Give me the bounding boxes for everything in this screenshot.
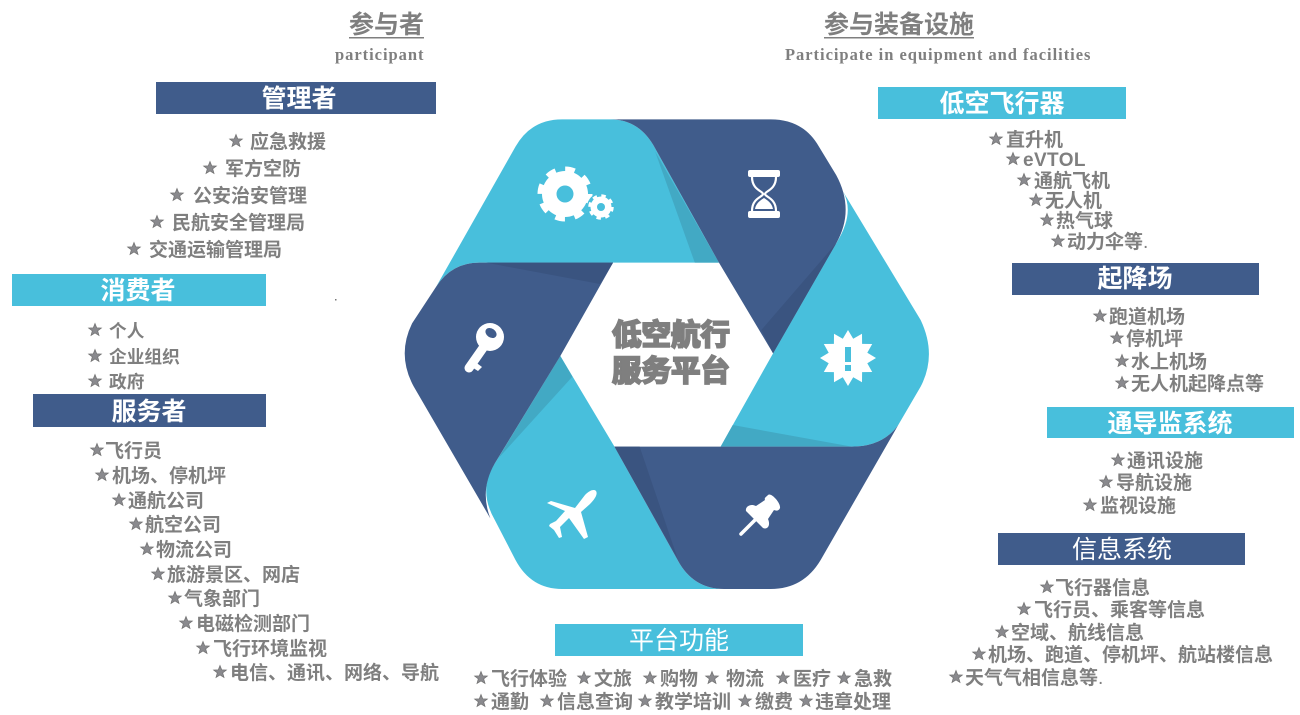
list: platform functions: 医疗 xyxy=(793,668,831,690)
bar: platform functions xyxy=(555,624,803,656)
icon: alert burst xyxy=(820,330,876,386)
list: service providers: 电磁检测部门 xyxy=(196,612,310,635)
icon: airplane xyxy=(547,490,597,539)
center label xyxy=(612,319,730,388)
decorative dot xyxy=(335,299,336,300)
bar: managers: 管理者 xyxy=(261,85,337,113)
list: aircraft: 通航飞机 xyxy=(1034,169,1110,192)
list: information systems: 空域、航线信息 xyxy=(1011,621,1144,644)
list: airfields: 停机坪 xyxy=(1126,328,1183,350)
list: information systems: 机场、跑道、停机坪、航站楼信息 xyxy=(988,643,1273,666)
list: service providers: 气象部门 xyxy=(184,587,260,610)
list: CNS systems xyxy=(1084,450,1203,517)
list: service providers: 航空公司 xyxy=(145,513,221,536)
list: service providers: 机场、停机坪 xyxy=(112,465,226,487)
list: information systems: 飞行员、乘客等信息 xyxy=(1034,598,1205,621)
list: service providers: 飞行环境监视 xyxy=(213,637,327,660)
hexagon ribbon diagram xyxy=(405,119,929,589)
list: airfields: 无人机起降点等 xyxy=(1131,373,1264,395)
list: aircraft xyxy=(990,129,1148,253)
list: CNS systems: 监视设施 xyxy=(1100,495,1176,517)
bar: managers xyxy=(156,82,436,114)
list: consumers: 企业组织 xyxy=(109,346,180,367)
list: platform functions: 缴费 xyxy=(755,691,793,713)
list: CNS systems: 导航设施 xyxy=(1116,471,1192,494)
bar: airfields xyxy=(1012,263,1259,295)
list: managers: 公安治安管理 xyxy=(193,184,307,207)
ribbon: right xyxy=(721,192,929,447)
heading: equipment and facilities: 参与装备设施 xyxy=(824,10,974,39)
list: platform functions: 急救 xyxy=(854,667,892,690)
ribbon: bottom right xyxy=(614,425,898,589)
ribbon: top left xyxy=(436,119,719,287)
list: platform functions xyxy=(475,667,892,713)
bar: information systems: 信息系统 xyxy=(1072,536,1172,564)
list: service providers xyxy=(91,440,439,684)
list: service providers: 电信、通讯、网络、导航 xyxy=(230,661,439,684)
center label: 服务平台 xyxy=(612,354,730,388)
list: platform functions: 通勤 xyxy=(491,691,529,713)
list: aircraft: 直升机 xyxy=(1006,129,1063,151)
subheading: equipment and facilities: Participate in equipment and facilities xyxy=(785,45,1091,64)
list: consumers: 政府 xyxy=(109,371,144,392)
bar: low altitude aircraft xyxy=(878,87,1126,119)
list: service providers: 物流公司 xyxy=(156,539,232,561)
bar: low altitude aircraft: 低空飞行器 xyxy=(939,90,1065,118)
ribbon: left xyxy=(405,263,613,518)
list: platform functions: 购物 xyxy=(660,668,698,690)
list: consumers xyxy=(89,321,180,392)
list: CNS systems: 通讯设施 xyxy=(1127,450,1203,472)
list: managers: 交通运输管理局 xyxy=(149,238,282,261)
list: platform functions: 教学培训 xyxy=(655,690,731,713)
icon: hourglass xyxy=(748,170,780,218)
heading: participants: 参与者 xyxy=(349,10,424,39)
subheading: participant: participant xyxy=(335,45,425,64)
bar: platform functions: 平台功能 xyxy=(629,627,729,655)
list: aircraft: 无人机 xyxy=(1045,190,1102,212)
bar: consumers: 消费者 xyxy=(100,277,176,305)
bar: CNS systems xyxy=(1047,407,1294,438)
list: service providers: 通航公司 xyxy=(128,489,204,512)
list: service providers: 旅游景区、网店 xyxy=(167,563,300,586)
bar: service providers: 服务者 xyxy=(111,398,187,426)
list: platform functions: 信息查询 xyxy=(557,690,633,713)
list: platform functions: 飞行体验 xyxy=(491,667,567,690)
list: platform functions: 文旅 xyxy=(594,667,632,690)
list: information systems: 天气气相信息等. xyxy=(965,666,1103,689)
icon: gears xyxy=(540,170,615,221)
center label: 低空航行 xyxy=(612,319,730,352)
bar: CNS systems: 通导监系统 xyxy=(1107,410,1233,438)
bar: service providers xyxy=(33,394,266,427)
list: platform functions: 违章处理 xyxy=(815,690,891,713)
icon: key xyxy=(469,323,504,371)
list: information systems: 飞行器信息 xyxy=(1055,576,1150,599)
list: managers: 应急救援 xyxy=(250,130,326,153)
list: managers: 民航安全管理局 xyxy=(172,211,305,234)
list: aircraft: 动力伞等. xyxy=(1067,230,1148,253)
list: platform functions: 物流 xyxy=(726,668,764,690)
list: airfields xyxy=(1094,305,1264,395)
list: service providers: 飞行员 xyxy=(105,440,162,462)
ribbon: bottom left xyxy=(486,356,724,589)
list: consumers: 个人 xyxy=(109,321,145,341)
list: managers: 军方空防 xyxy=(225,157,301,180)
bar: consumers xyxy=(12,274,266,306)
list: aircraft: eVTOL xyxy=(1023,150,1086,171)
list: airfields: 跑道机场 xyxy=(1109,305,1185,328)
list: airfields: 水上机场 xyxy=(1131,351,1207,373)
icon: push pin xyxy=(741,494,780,534)
bar: information systems xyxy=(998,533,1245,565)
ribbon: top right xyxy=(610,119,846,353)
bar: airfields: 起降场 xyxy=(1097,265,1173,293)
list: information systems xyxy=(950,576,1273,689)
list: aircraft: 热气球 xyxy=(1056,210,1113,232)
list: managers xyxy=(128,130,326,261)
